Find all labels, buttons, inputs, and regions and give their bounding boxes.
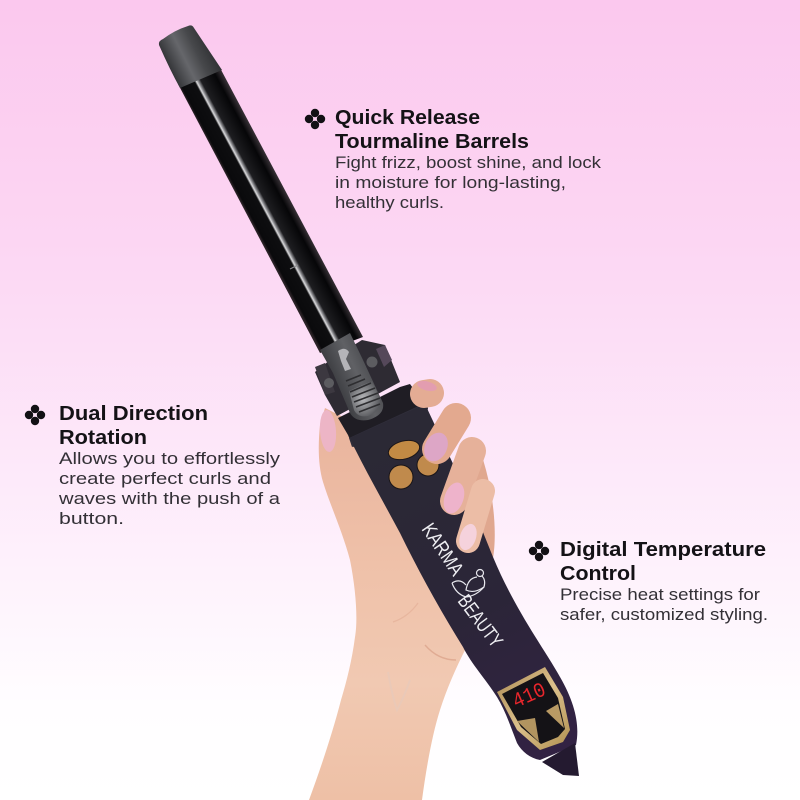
icon: four dots [305, 109, 325, 129]
icon: four dots [529, 541, 549, 561]
thumb nail [319, 409, 337, 453]
middle finger [420, 418, 456, 465]
description [560, 585, 768, 624]
digital display panel: 410 [509, 680, 550, 714]
heading [335, 107, 529, 153]
heading [59, 403, 208, 449]
heading: Tourmaline Barrels [335, 131, 529, 153]
heading: Digital Temperature [560, 539, 766, 561]
description: safer, customized styling. [560, 605, 768, 624]
heading: Quick Release [335, 107, 480, 129]
cord tip [542, 743, 579, 776]
description [58, 449, 281, 528]
heading: Control [560, 563, 636, 585]
heading: Rotation [59, 427, 147, 449]
description: Fight frizz, boost shine, and lock [335, 153, 602, 172]
index finger [416, 379, 438, 394]
description: waves with the push of a [58, 489, 281, 508]
handle [350, 404, 579, 776]
brand logo [417, 519, 507, 652]
swivel collar and release clip [315, 333, 428, 447]
description [335, 153, 602, 212]
brand logo: KARMA [417, 519, 468, 580]
barrel tip [159, 25, 222, 88]
control buttons [386, 437, 439, 489]
hand and forearm holding the iron [309, 408, 495, 800]
curling barrel [159, 25, 363, 353]
feature: quick release barrels [305, 107, 602, 212]
feature: digital temperature control [529, 539, 768, 624]
heading [560, 539, 766, 585]
description: create perfect curls and [59, 469, 271, 488]
shaded skin behind fingers [450, 445, 495, 558]
description: healthy curls. [335, 193, 444, 212]
pinky finger [456, 491, 483, 552]
fingers wrapped around the handle [319, 379, 483, 552]
digital display panel [497, 667, 570, 750]
brand logo: BEAUTY [453, 591, 507, 652]
description: Precise heat settings for [560, 585, 760, 604]
heading: Dual Direction [59, 403, 208, 425]
description: Allows you to effortlessly [59, 449, 281, 468]
ring finger [440, 451, 472, 516]
description: in moisture for long-lasting, [335, 173, 566, 192]
icon: four dots [25, 405, 45, 425]
feature: dual direction rotation [25, 403, 281, 528]
release clip [320, 333, 383, 420]
description: button. [59, 509, 124, 528]
